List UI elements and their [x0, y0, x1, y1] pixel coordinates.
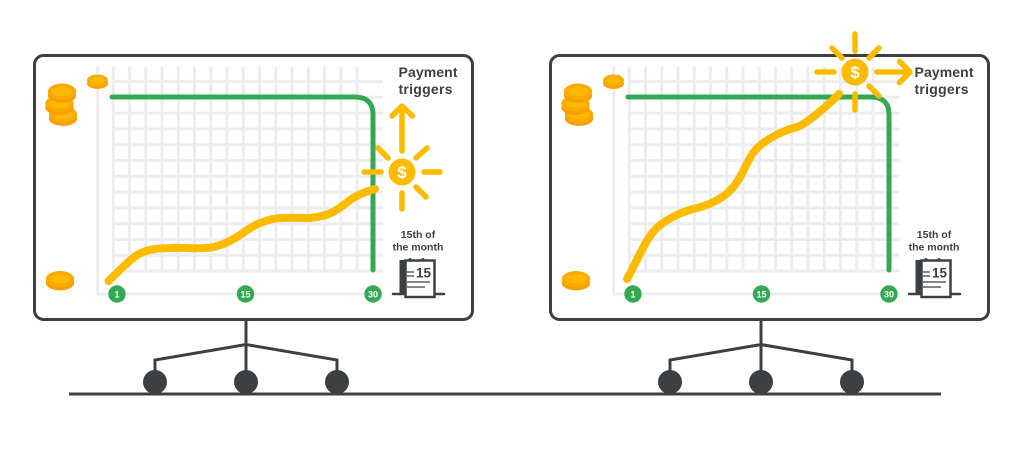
- day marker 15: 15: [240, 290, 251, 300]
- day marker 30: [880, 285, 898, 303]
- panel: left monitor: [34, 56, 472, 394]
- day marker 15: [237, 285, 254, 303]
- spending curve: [108, 189, 375, 281]
- label: 15th of the month: 15th of: [917, 229, 952, 241]
- icon: dollar sun: $: [850, 63, 860, 82]
- arrow: up: [392, 106, 412, 151]
- spending curve: [627, 94, 839, 279]
- icon: dollar sun: [817, 34, 879, 110]
- day marker 1: [108, 285, 126, 303]
- icon: dollar sun: [364, 148, 440, 209]
- label: 15th of the month: the month: [909, 242, 959, 254]
- icon: calendar: 15: [932, 264, 947, 280]
- threshold line: green: [628, 97, 889, 270]
- label: 15th of the month: [909, 229, 959, 254]
- icon: single coin top: [603, 74, 624, 89]
- panel: right monitor: [550, 34, 988, 394]
- label: 15th of the month: [393, 229, 443, 254]
- monitor frame: [550, 56, 988, 320]
- heading: payment triggers: [398, 64, 458, 97]
- label: 15th of the month: the month: [393, 242, 443, 254]
- monitor frame: [34, 56, 472, 320]
- day marker 30: [364, 285, 382, 303]
- icon: calendar: [909, 258, 960, 297]
- heading: payment triggers: Payment: [914, 64, 974, 80]
- icon: single coin bottom: [562, 271, 590, 290]
- label: 15th of the month: 15th of: [401, 229, 436, 241]
- chart grid: [614, 67, 899, 294]
- heading: payment triggers: triggers: [914, 81, 969, 97]
- day marker 30: 30: [884, 290, 894, 300]
- day marker 1: 1: [114, 290, 120, 300]
- monitor stem and wheels: [143, 320, 349, 394]
- day marker 15: 15: [756, 290, 767, 300]
- heading: payment triggers: triggers: [398, 81, 453, 97]
- heading: payment triggers: [914, 64, 974, 97]
- chart grid: [98, 67, 383, 294]
- day marker 15: [753, 285, 770, 303]
- threshold line: green: [112, 97, 373, 270]
- icon: coin stack: [45, 84, 77, 126]
- day marker 30: 30: [368, 290, 378, 300]
- icon: coin stack: [561, 84, 593, 126]
- icon: dollar sun: $: [397, 163, 407, 182]
- day marker 1: [624, 285, 642, 303]
- day marker 1: 1: [630, 290, 636, 300]
- icon: calendar: [393, 258, 444, 297]
- arrow: right: [877, 62, 910, 82]
- icon: single coin bottom: [46, 271, 74, 290]
- monitor stem and wheels: [658, 320, 864, 394]
- heading: payment triggers: Payment: [398, 64, 458, 80]
- icon: single coin top: [87, 74, 108, 89]
- icon: calendar: 15: [416, 264, 431, 280]
- stand base line: [69, 392, 941, 396]
